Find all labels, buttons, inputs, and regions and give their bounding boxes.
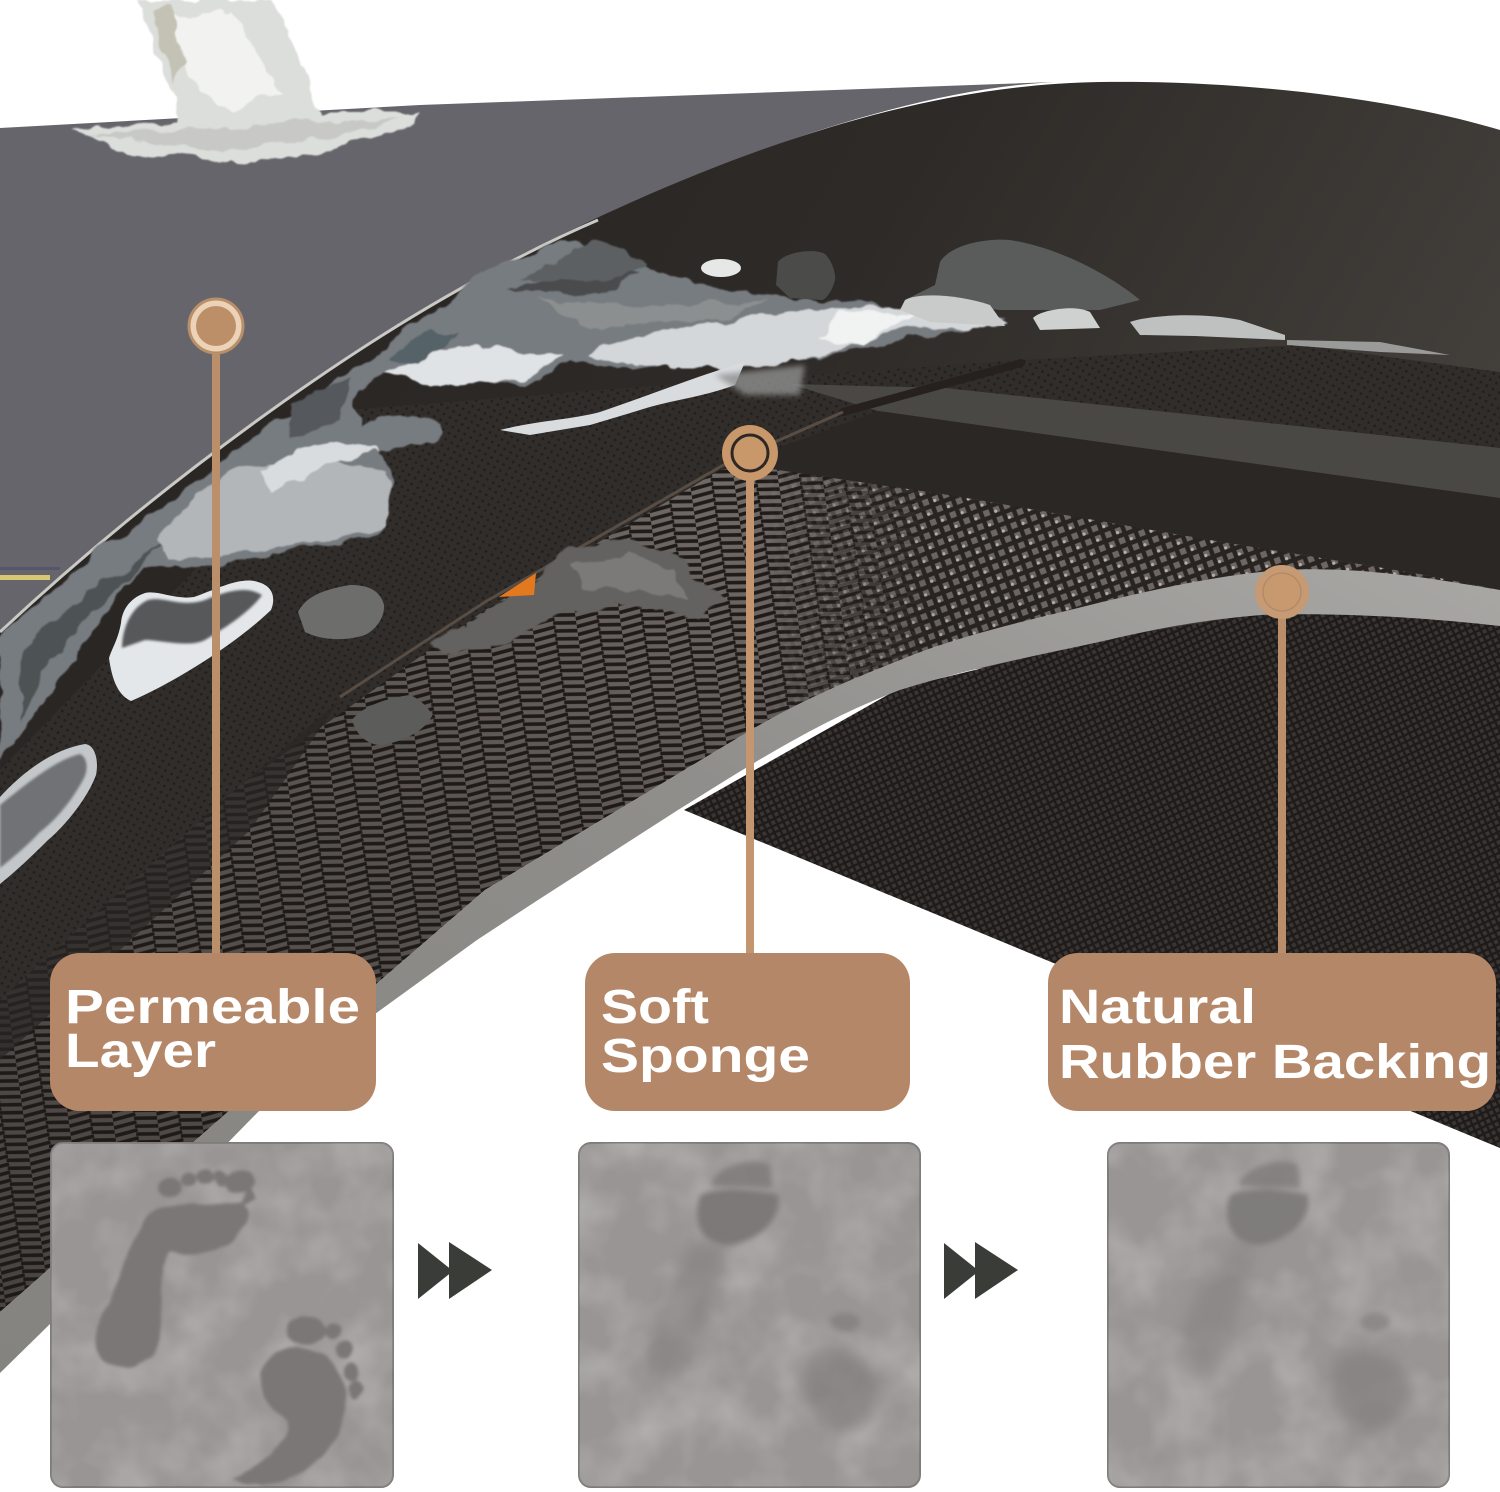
label: soft sponge: Sponge [601, 1030, 810, 1083]
label: soft sponge: Soft [601, 981, 709, 1034]
marker: rubber backing [1256, 566, 1308, 955]
label: permeable layer [50, 953, 376, 1111]
label: natural rubber backing [1048, 953, 1496, 1111]
dark water drop [776, 251, 835, 300]
label: permeable layer: Layer [65, 1025, 216, 1078]
label: natural rubber backing: Natural [1059, 981, 1256, 1034]
diagonal seam between layers [340, 412, 843, 697]
panel: natural rubber underside [684, 613, 1500, 1148]
marker: permeable layer [189, 299, 243, 955]
icon: water splash on top surface [75, 0, 418, 165]
water droplet: upper [298, 585, 384, 639]
water soaking through left band [0, 240, 1005, 762]
arrow: double chevron one [418, 1242, 492, 1299]
water droplet: lower [352, 695, 432, 745]
water: right cluster [900, 240, 1450, 355]
panel: grey top surface of mat [0, 82, 1055, 630]
panel: coarse herringbone layer [0, 466, 1500, 1312]
label: soft sponge [585, 953, 910, 1111]
water streak [500, 362, 745, 435]
marker: soft sponge [722, 425, 778, 956]
water bean: bottom left [0, 744, 97, 884]
panel: light band of sponge edge [790, 384, 1500, 498]
panel: grey rubber edge strip [0, 569, 1500, 1373]
water on herringbone [430, 538, 725, 655]
panel: dark sponge side [720, 411, 1500, 590]
panel: dark permeable layer body [0, 82, 1500, 1100]
dark diagonal crease on sponge layer [843, 363, 1021, 412]
photo: fresh footprints on mat [51, 1143, 393, 1487]
photo: fading footprints on mat [579, 1143, 920, 1487]
surface edge highlight [0, 220, 598, 632]
panel: herringbone shadow near sponge [0, 700, 340, 1060]
panel: fine woven sponge layer [0, 345, 1500, 1000]
orange fleck [499, 573, 536, 597]
white water drop [701, 259, 741, 277]
label: permeable layer: Permeable [65, 981, 360, 1034]
label: natural rubber backing: Rubber Backing [1059, 1036, 1491, 1089]
water reflection near sponge marker [715, 365, 805, 395]
arrow: double chevron two [944, 1242, 1018, 1299]
water bean: centre left [109, 581, 273, 701]
photo: nearly dry footprints on mat [1108, 1143, 1449, 1487]
